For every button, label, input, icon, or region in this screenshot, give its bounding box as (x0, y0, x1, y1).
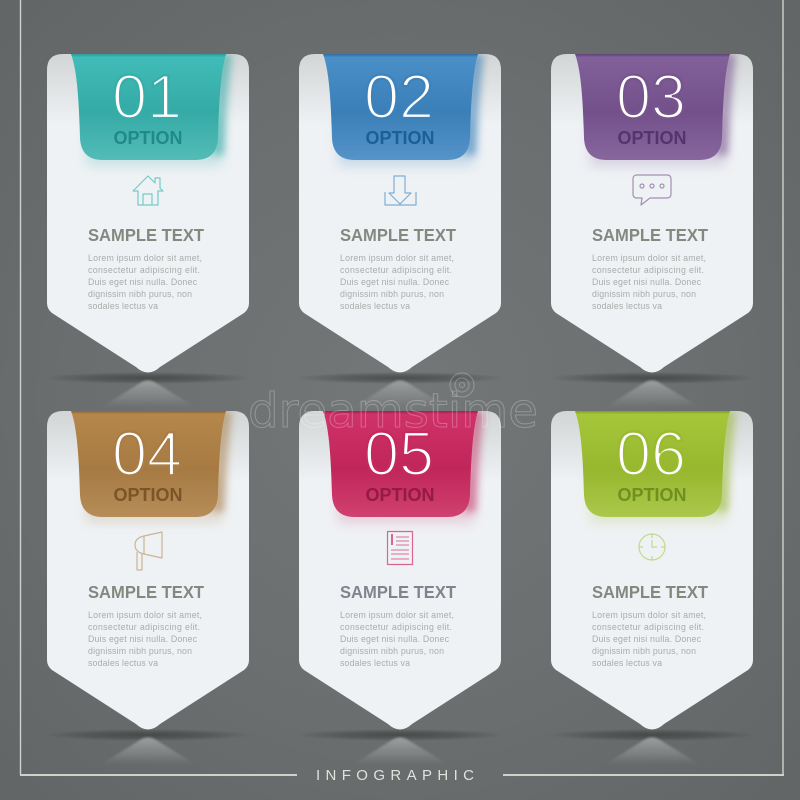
body text: Duis eget nisi nulla. Donec (88, 277, 198, 287)
footer label: INFOGRAPHIC (316, 767, 474, 784)
body text: Duis eget nisi nulla. Donec (88, 634, 198, 644)
number: 03 (616, 63, 686, 132)
body text: consectetur adipiscing elit. (592, 265, 704, 275)
heading: SAMPLE TEXT (592, 225, 708, 245)
panel: option 03 (547, 54, 757, 408)
icon: speech bubble (633, 175, 671, 205)
body text: sodales lectus va (88, 658, 158, 668)
floor shadow and reflection (43, 729, 253, 765)
body text: Duis eget nisi nulla. Donec (592, 277, 702, 287)
body text (340, 253, 454, 311)
floor shadow and reflection (547, 372, 757, 408)
body text: sodales lectus va (88, 301, 158, 311)
floor shadow and reflection (295, 729, 505, 765)
heading: SAMPLE TEXT (340, 225, 456, 245)
number: 04 (112, 420, 182, 489)
watermark: dreamstime (248, 384, 538, 439)
body text: consectetur adipiscing elit. (340, 622, 452, 632)
heading: SAMPLE TEXT (340, 582, 456, 602)
ribbon shadow (590, 411, 736, 523)
body text: consectetur adipiscing elit. (88, 265, 200, 275)
floor shadow and reflection (295, 372, 505, 408)
option label: OPTION (114, 128, 182, 148)
panel: option 05 (295, 411, 505, 765)
body text: dignissim nibh purus, non (340, 646, 444, 656)
body text: sodales lectus va (592, 658, 662, 668)
heading: SAMPLE TEXT (592, 582, 708, 602)
ribbon (575, 411, 730, 517)
icon: house (133, 176, 163, 205)
card (47, 411, 249, 730)
card (299, 411, 501, 730)
panel: option 04 (43, 411, 253, 765)
option label: OPTION (114, 485, 182, 505)
body text (340, 610, 454, 668)
body text: sodales lectus va (592, 301, 662, 311)
body text: Duis eget nisi nulla. Donec (340, 634, 450, 644)
body text: dignissim nibh purus, non (592, 646, 696, 656)
floor shadow and reflection (547, 729, 757, 765)
option label: OPTION (366, 485, 434, 505)
body text (88, 253, 202, 311)
ribbon (71, 54, 226, 160)
body text: dignissim nibh purus, non (592, 289, 696, 299)
body text: dignissim nibh purus, non (340, 289, 444, 299)
body text: Lorem ipsum dolor sit amet, (88, 253, 202, 263)
icon: clock (639, 534, 665, 560)
option label: OPTION (366, 128, 434, 148)
body text: Lorem ipsum dolor sit amet, (340, 610, 454, 620)
panel: option 02 (295, 54, 505, 408)
ribbon shadow (590, 54, 736, 166)
icon: document (388, 532, 412, 564)
icon: download (385, 176, 416, 205)
heading: SAMPLE TEXT (88, 582, 204, 602)
ribbon shadow (86, 411, 232, 523)
body text: dignissim nibh purus, non (88, 289, 192, 299)
body text: Duis eget nisi nulla. Donec (592, 634, 702, 644)
ribbon (71, 411, 226, 517)
card (551, 411, 753, 730)
body text: consectetur adipiscing elit. (340, 265, 452, 275)
panel: option 06 (547, 411, 757, 765)
number: 01 (112, 63, 182, 132)
card (299, 54, 501, 372)
option label: OPTION (618, 128, 686, 148)
card (551, 54, 753, 372)
ribbon (323, 54, 478, 160)
body text (592, 253, 706, 311)
body text: Duis eget nisi nulla. Donec (340, 277, 450, 287)
body text: sodales lectus va (340, 301, 410, 311)
body text: sodales lectus va (340, 658, 410, 668)
ribbon shadow (338, 411, 484, 523)
ribbon (323, 411, 478, 517)
body text (592, 610, 706, 668)
body text (88, 610, 202, 668)
icon: megaphone (135, 532, 162, 570)
body text: consectetur adipiscing elit. (88, 622, 200, 632)
body text: dignissim nibh purus, non (88, 646, 192, 656)
body text: Lorem ipsum dolor sit amet, (340, 253, 454, 263)
ribbon (575, 54, 730, 160)
ribbon shadow (86, 54, 232, 166)
body text: Lorem ipsum dolor sit amet, (592, 253, 706, 263)
floor shadow and reflection (43, 372, 253, 408)
body text: Lorem ipsum dolor sit amet, (592, 610, 706, 620)
body text: consectetur adipiscing elit. (592, 622, 704, 632)
option label: OPTION (618, 485, 686, 505)
body text: Lorem ipsum dolor sit amet, (88, 610, 202, 620)
heading: SAMPLE TEXT (88, 225, 204, 245)
ribbon shadow (338, 54, 484, 166)
card (47, 54, 249, 372)
number: 05 (364, 420, 434, 489)
panel: option 01 (43, 54, 253, 408)
number: 02 (364, 63, 434, 132)
number: 06 (616, 420, 686, 489)
